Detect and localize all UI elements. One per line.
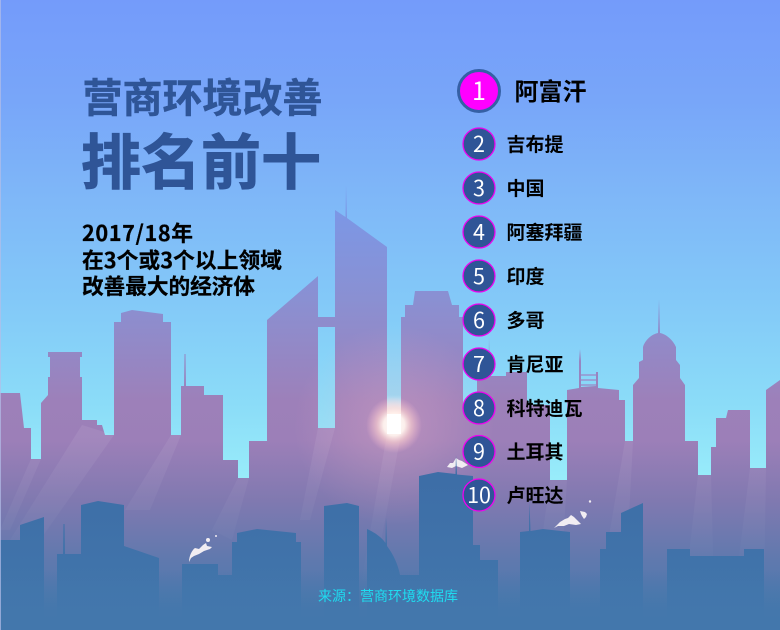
title line 2: 排名前十 (81, 115, 321, 202)
rank 1: 阿富汗 (458, 70, 586, 112)
rank 6: 多哥 (463, 304, 545, 336)
subtitle: 2017/18年 (82, 217, 193, 248)
rank 8: 科特迪瓦: 8 (473, 392, 485, 423)
rank 5: 印度 (463, 260, 545, 292)
left edge line (0, 0, 1, 630)
rank 4: 阿塞拜疆: 4 (473, 216, 485, 247)
rank 10: 卢旺达: 卢旺达 (506, 481, 564, 508)
rank 8: 科特迪瓦: 科特迪瓦 (506, 394, 583, 421)
light in the gap above the sun (387, 395, 401, 434)
sun halo (294, 325, 494, 525)
sun (366, 397, 422, 453)
source note: 来源：营商环境数据库 (318, 586, 458, 606)
rank 4: 阿塞拜疆 (463, 216, 583, 248)
rank 7: 肯尼亚: 肯尼亚 (506, 350, 564, 377)
rank 8: 科特迪瓦 (463, 392, 583, 424)
subtitle: 在3个或3个以上领域 (82, 244, 282, 275)
back skyline (0, 185, 780, 630)
rank 2: 吉布提: 2 (473, 128, 485, 159)
rank 10: 卢旺达: 10 (467, 479, 491, 510)
rank 9: 土耳其 (463, 436, 564, 468)
rank 1: 阿富汗: 1 (472, 72, 486, 108)
rank 3: 中国: 中国 (506, 174, 545, 201)
title line 1: 营商环境改善 (82, 66, 322, 124)
rank 7: 肯尼亚: 7 (473, 348, 485, 379)
antenna rungs on rooftop (581, 375, 596, 385)
rank 2: 吉布提: 吉布提 (506, 130, 564, 157)
title (81, 66, 322, 202)
rank 9: 土耳其: 9 (473, 436, 485, 466)
clouds (189, 458, 591, 562)
rank 4: 阿塞拜疆: 阿塞拜疆 (506, 218, 583, 245)
rank 3: 中国 (463, 172, 545, 204)
front skyline (0, 455, 764, 630)
rank 2: 吉布提 (463, 128, 564, 160)
rank 10: 卢旺达 (463, 479, 564, 511)
rank 1: 阿富汗: 阿富汗 (514, 72, 586, 107)
rank 5: 印度: 印度 (506, 262, 545, 289)
light beams (0, 425, 766, 590)
rank 9: 土耳其: 土耳其 (506, 438, 564, 464)
rank 7: 肯尼亚 (463, 348, 564, 380)
rank 5: 印度: 5 (473, 260, 485, 291)
rank 3: 中国: 3 (473, 172, 485, 203)
rank 6: 多哥: 6 (473, 304, 485, 335)
rank 6: 多哥: 多哥 (506, 306, 545, 333)
subtitle (82, 217, 282, 301)
subtitle: 改善最大的经济体 (82, 270, 255, 301)
ground fade (0, 570, 780, 630)
